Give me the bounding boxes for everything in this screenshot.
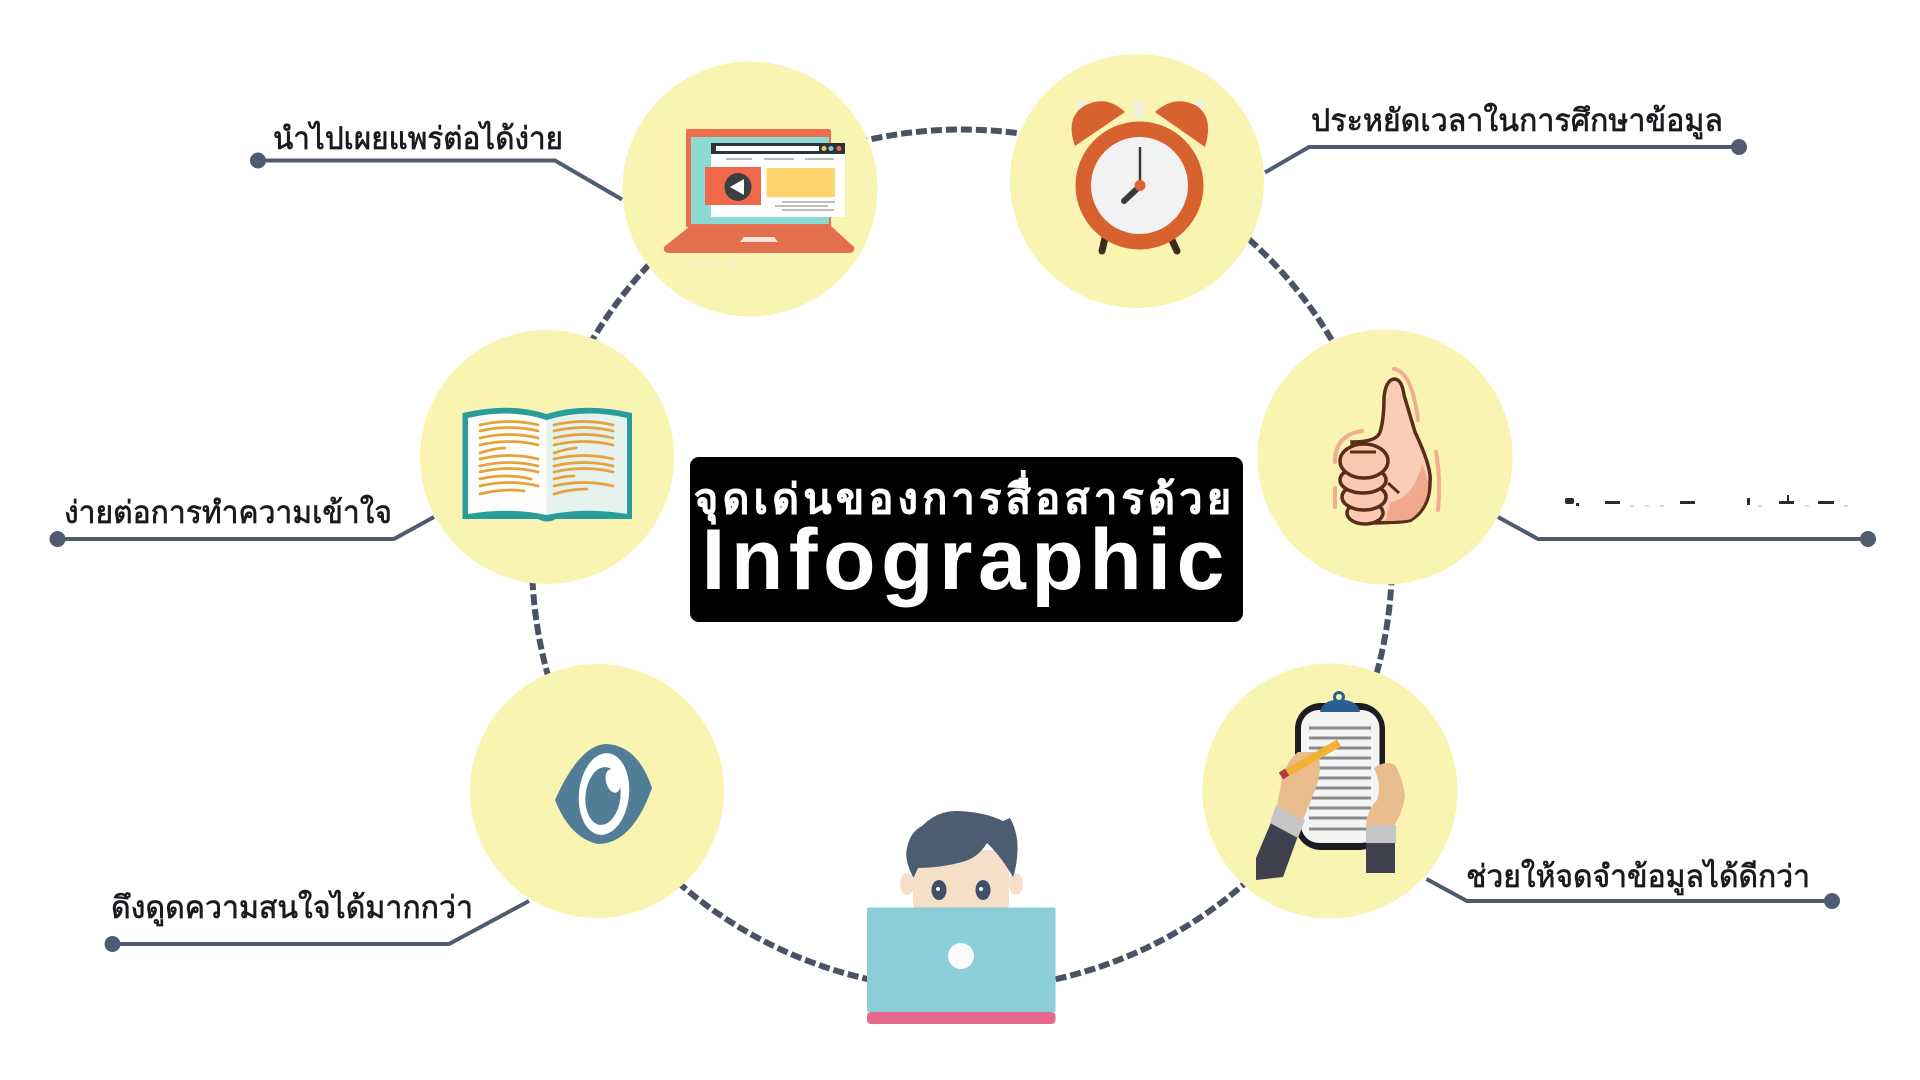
panel: clipboard circle xyxy=(1202,664,1458,918)
label: attention: ดึงดูดความสนใจได้มากกว่า xyxy=(111,890,473,926)
title line 1: จุดเด่นของการสื่อสารด้วย xyxy=(694,470,1231,525)
panel: laptop circle xyxy=(622,62,878,316)
icon: laptop xyxy=(664,129,854,267)
icon: thumbs up xyxy=(1335,369,1439,524)
leader: attention xyxy=(104,901,529,952)
leader: credibility xyxy=(1498,517,1876,547)
label: share: นำไปเผยแพร่ต่อได้ง่าย xyxy=(273,121,563,156)
leader: easy to understand xyxy=(50,517,434,547)
title line 2: Infographic xyxy=(702,512,1224,608)
icon: open book xyxy=(462,408,632,522)
leader: save time xyxy=(1265,139,1747,172)
icon: alarm clock xyxy=(1072,100,1208,251)
label: memory: ช่วยให้จดจำข้อมูลได้ดีกว่า xyxy=(1466,859,1810,895)
label fragments: partly revealed text beside thumb xyxy=(1565,495,1848,507)
leader: share xyxy=(250,152,622,200)
leader: memory xyxy=(1426,879,1840,909)
title box xyxy=(690,457,1243,622)
panel: clock circle xyxy=(1010,54,1264,308)
panel: book circle xyxy=(420,330,674,584)
icon: clipboard with hands xyxy=(1256,692,1405,880)
label: easy to understand: ง่ายต่อการทำความเข้าใจ xyxy=(64,495,392,530)
icon: eye xyxy=(555,744,652,844)
panel: thumb circle xyxy=(1258,330,1512,584)
label: save time: ประหยัดเวลาในการศึกษาข้อมูล xyxy=(1311,103,1723,139)
dashed ring xyxy=(532,130,1392,990)
icon: person behind laptop xyxy=(867,811,1056,1024)
panel: eye circle xyxy=(470,664,724,918)
